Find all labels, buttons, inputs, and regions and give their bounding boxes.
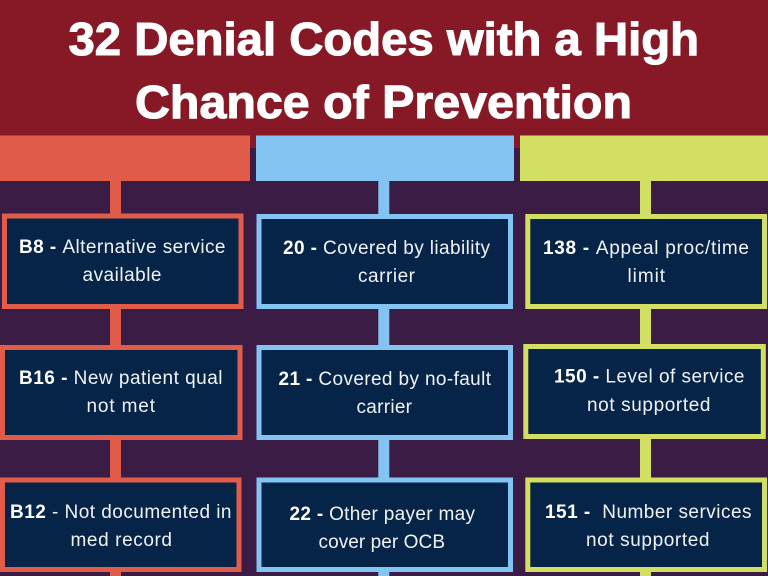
card: B8: B8 - Alternative service <box>19 237 226 258</box>
card: 150: 150 - Level of service <box>554 367 744 388</box>
panel: red column <box>0 136 250 576</box>
green column header bar <box>520 136 768 181</box>
card: B8: available <box>82 265 162 286</box>
card: 20: 20 - Covered by liability <box>283 238 490 259</box>
panel: blue column <box>256 136 514 576</box>
card: B16 <box>2 348 240 438</box>
card: B8 <box>4 216 241 306</box>
card: B12: B12 - Not documented in <box>10 502 232 523</box>
card: B12 <box>2 480 239 570</box>
card: 21: carrier <box>356 397 413 418</box>
title: 32 Denial Codes with a High <box>68 13 699 65</box>
card: 22 <box>259 480 510 570</box>
card: 21 <box>259 348 510 438</box>
panel: green column <box>520 136 768 576</box>
red column connector <box>110 181 121 576</box>
card: B12: med record <box>70 530 172 551</box>
blue column connector <box>378 181 389 576</box>
card: 150: not supported <box>587 395 710 416</box>
red column header bar <box>0 136 250 181</box>
card: 151: not supported <box>586 530 710 551</box>
title: Chance of Prevention <box>135 76 632 128</box>
green column connector <box>640 181 651 576</box>
card: 22: 22 - Other payer may <box>290 504 476 525</box>
card: B16: not met <box>86 396 156 417</box>
card: 21: 21 - Covered by no-fault <box>278 369 492 390</box>
card: 150 <box>526 346 763 436</box>
card: 20: carrier <box>358 266 416 287</box>
card: 138: 138 - Appeal proc/time <box>543 238 749 259</box>
card: 151: 151 - Number services <box>545 502 752 523</box>
card: 20 <box>259 216 510 306</box>
card: 138: limit <box>628 266 666 287</box>
card: B16: B16 - New patient qual <box>19 368 222 389</box>
blue column header bar <box>256 136 514 181</box>
title <box>68 13 699 128</box>
card: 22: cover per OCB <box>318 532 445 553</box>
card: 138 <box>528 216 764 306</box>
card: 151 <box>528 480 764 570</box>
